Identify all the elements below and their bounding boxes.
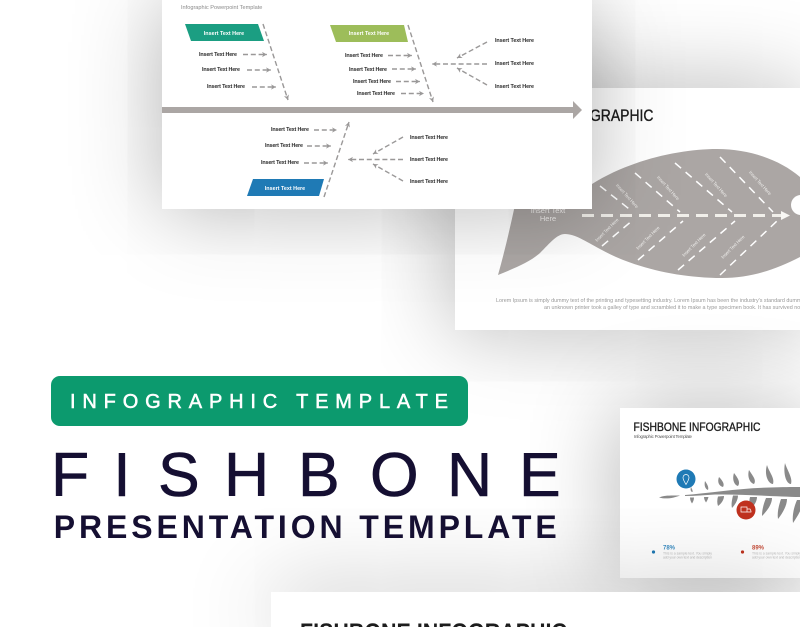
fish eye hole bbox=[791, 195, 800, 215]
icon: red delivery truck bbox=[736, 500, 756, 520]
fish bone labels bbox=[594, 170, 773, 260]
panel: grey fish slide bbox=[455, 88, 800, 330]
panel: fishbone diagram slide bbox=[162, 0, 592, 209]
fish head label: Insert Text bbox=[531, 206, 566, 215]
main heading bbox=[51, 440, 561, 545]
fish bone labels: Insert Text Here bbox=[615, 183, 640, 210]
branch: green: Insert Text Here bbox=[345, 53, 383, 59]
branch: upper right causes: Insert Text Here bbox=[495, 84, 534, 90]
stat: 89% bbox=[741, 546, 800, 560]
stat: 89%: add your own text and description bbox=[752, 556, 800, 560]
branch: blue bbox=[247, 122, 349, 197]
heading: fishbone: FISHBONE bbox=[51, 440, 561, 510]
branch: teal: Insert Text Here bbox=[204, 31, 244, 37]
branch: teal: Insert Text Here bbox=[207, 84, 245, 90]
leaf fish upper fins bbox=[691, 463, 791, 492]
fish bone labels: Insert Text Here bbox=[594, 217, 620, 243]
stat: 89%: This is a sample text. You simply bbox=[752, 552, 800, 556]
lorem ipsum caption bbox=[496, 298, 800, 311]
main spine arrow bbox=[162, 101, 582, 119]
leaf fish lower fins bbox=[690, 496, 800, 523]
stat: 78%: This is a sample text. You simply bbox=[663, 552, 712, 556]
branch: lower right causes bbox=[348, 135, 448, 185]
fish silhouette bbox=[498, 149, 800, 278]
fish upper bones bbox=[600, 157, 773, 212]
branch: green: Insert Text Here bbox=[357, 91, 395, 97]
fish head label: Here bbox=[540, 214, 556, 223]
branch: teal: Insert Text Here bbox=[199, 52, 237, 58]
branch: lower right causes: Insert Text Here bbox=[410, 157, 448, 163]
branch: upper right causes: Insert Text Here bbox=[495, 61, 534, 67]
stat: 89%: 89% bbox=[752, 546, 765, 552]
badge: infographic template bbox=[51, 376, 468, 426]
fish bone labels: Insert Text Here bbox=[635, 225, 661, 251]
badge: infographic template: INFOGRAPHIC TEMPLATE bbox=[70, 391, 448, 413]
panel: bottom cropped slide bbox=[271, 592, 800, 627]
branch: green: Insert Text Here bbox=[349, 31, 389, 37]
fish bone labels: Insert Text Here bbox=[704, 172, 729, 199]
slide title: FISHBONE INFOGRAPHIC bbox=[634, 420, 761, 434]
stat: 78% bbox=[652, 546, 712, 560]
fish bone labels: Insert Text Here bbox=[656, 175, 681, 202]
branch: green: Insert Text Here bbox=[353, 79, 391, 85]
leaf fish spine bbox=[659, 487, 800, 498]
stat: 78%: add your own text and description bbox=[663, 556, 712, 560]
branch: teal bbox=[185, 24, 288, 100]
branch: green bbox=[330, 25, 433, 102]
branch: teal: Insert Text Here bbox=[202, 67, 240, 73]
fish bone labels: Insert Text Here bbox=[748, 170, 773, 197]
branch: blue: Insert Text Here bbox=[265, 186, 305, 192]
branch: blue: Insert Text Here bbox=[271, 127, 309, 133]
branch: green: Insert Text Here bbox=[349, 67, 387, 73]
branch: blue: Insert Text Here bbox=[265, 143, 303, 149]
branch: upper right causes bbox=[432, 38, 534, 90]
panel: leaf fishbone slide bbox=[620, 408, 800, 578]
fish head label bbox=[531, 206, 566, 223]
heading: presentation template: PRESENTATION TEMPLATE bbox=[54, 509, 557, 545]
fish spine arrow bbox=[582, 211, 790, 220]
slide title: FISHBONE INFOGRAPHIC bbox=[482, 106, 654, 125]
branch: lower right causes: Insert Text Here bbox=[410, 135, 448, 141]
branch: blue: Insert Text Here bbox=[261, 160, 299, 166]
icon: blue location pin bbox=[676, 470, 696, 488]
slide subtitle: Infographic Powerpoint Template bbox=[634, 434, 693, 439]
fish lower bones bbox=[602, 220, 777, 275]
slide subtitle: Infographic Powerpoint Template bbox=[181, 5, 262, 11]
stat: 78%: 78% bbox=[663, 546, 676, 552]
fish bone labels: Insert Text Here bbox=[681, 232, 707, 258]
branch: lower right causes: Insert Text Here bbox=[410, 179, 448, 185]
branch: upper right causes: Insert Text Here bbox=[495, 38, 534, 44]
fish bone labels: Insert Text Here bbox=[720, 234, 746, 260]
